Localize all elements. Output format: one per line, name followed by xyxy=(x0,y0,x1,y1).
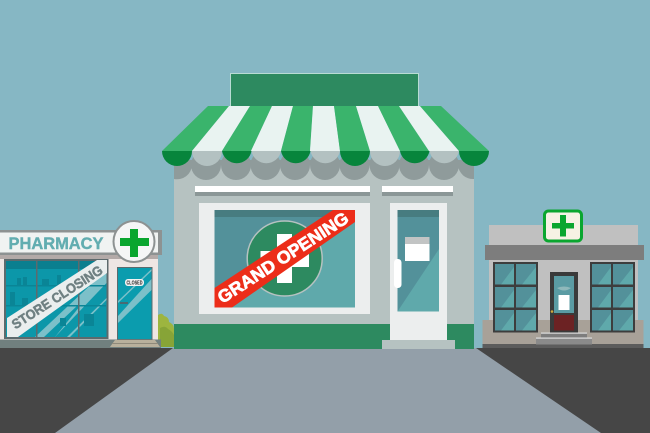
door xyxy=(550,272,578,332)
closing pharmacy building xyxy=(0,221,162,348)
green cross circle logo xyxy=(247,221,322,296)
bushes xyxy=(0,313,174,347)
main window xyxy=(199,203,370,314)
pharmacy sign xyxy=(0,230,162,255)
grand opening pharmacy building xyxy=(162,74,489,349)
right window xyxy=(590,262,635,332)
awning shadow scallops xyxy=(174,150,474,180)
icon: green cross sign xyxy=(544,211,582,241)
entrance step xyxy=(382,340,455,349)
shop window xyxy=(4,259,108,339)
street xyxy=(0,348,650,433)
store closing banner: STORE CLOSING xyxy=(9,263,105,332)
door handle xyxy=(394,259,402,288)
striped awning xyxy=(162,106,489,166)
door notice xyxy=(558,295,570,310)
icon: green cross badge xyxy=(114,221,154,262)
door knob xyxy=(551,310,553,313)
steps xyxy=(536,332,592,344)
grand opening banner: GRAND OPENING xyxy=(214,208,352,307)
building wall xyxy=(174,165,474,335)
stone base xyxy=(482,320,644,345)
door notice xyxy=(405,237,430,261)
transom bars xyxy=(195,186,453,196)
green base xyxy=(174,324,474,349)
entrance door xyxy=(390,203,447,341)
pharmacy sign: PHARMACY xyxy=(8,234,104,253)
roof band xyxy=(485,245,644,260)
neighbouring pharmacy building xyxy=(482,211,644,348)
hanging sign xyxy=(230,74,418,106)
left window xyxy=(493,262,538,332)
base and steps xyxy=(0,340,161,348)
storefront wall xyxy=(0,254,158,342)
closed door xyxy=(117,267,152,340)
closed sign: CLOSED xyxy=(126,281,143,287)
wall xyxy=(489,225,638,325)
